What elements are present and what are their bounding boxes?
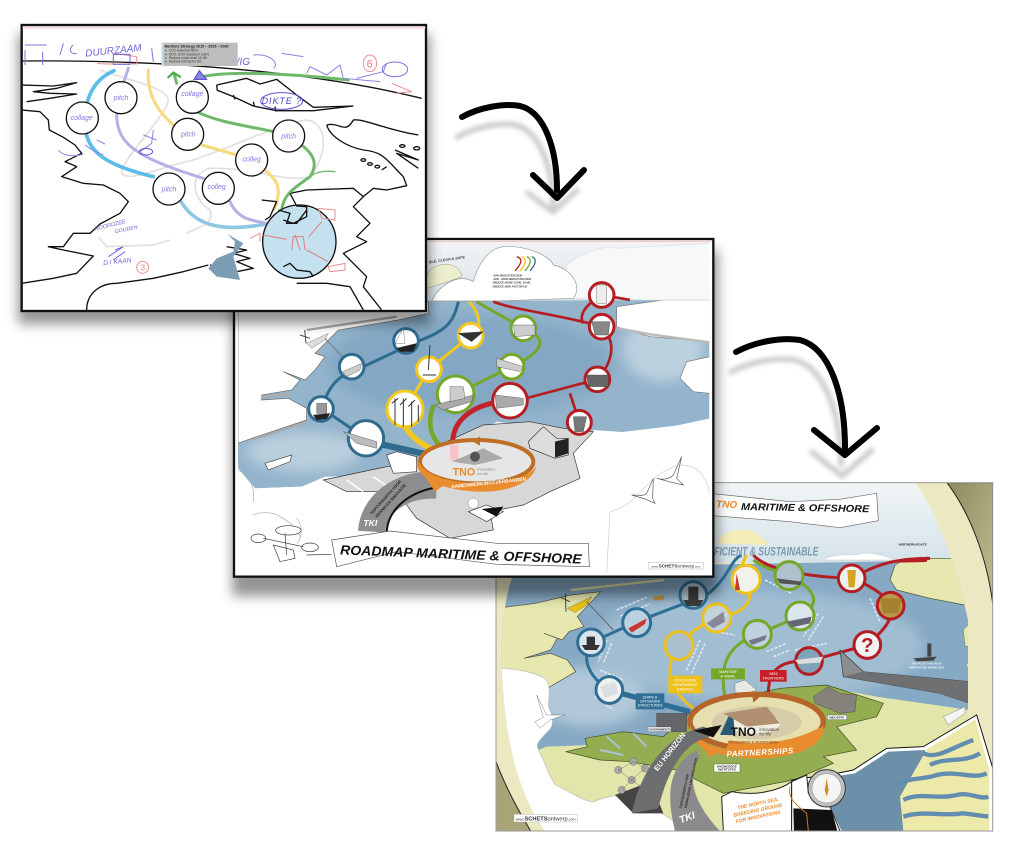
circle: TNO hub [263,205,336,278]
captions: white notes beside circles [595,580,880,710]
circle labels: pitch [113,95,128,102]
label: new frontiers [760,670,787,682]
heading: efficient and sustainable: EFFICIENT & SUSTAINABLE [703,544,819,558]
label: ships and offshore structures [636,693,664,709]
label: ships and offshore structures: STRUCTURES [637,703,663,707]
orange ring: samenwerkingsverbanden: for life [477,471,489,476]
callout: maritime strategy: Maritime Strategy 2015 – 2025 – 2030 [164,44,229,48]
icon: wind turbine and cable [561,593,613,630]
banner: TNO maritime and offshore: MARITIME & OFFSHORE [741,502,870,515]
banner: roadmap maritime and offshore [332,531,589,567]
panel: first whiteboard sketch: 3 [141,264,146,273]
icon: question mark in circle: ? [861,634,874,657]
label: offshore renewable energy: ENERGY [677,687,694,692]
circle labels: collage [71,115,93,122]
signs: THE PLUG AND PLAY [911,661,942,665]
gray arc: TKI: TOPCONSORTIA FOR [679,773,690,809]
text: TKI: TKI [678,810,697,826]
signs [647,543,944,772]
compass [808,770,845,807]
orange ring: samenwerkingsverbanden [417,437,537,492]
text: strategy goals: -20% REDUCTION 2030 [493,273,523,277]
arc: TKI: TOPCONSORTIA VOOR [369,479,402,516]
label: maritime and naval [711,668,745,679]
label: maritime and naval: & NAVAL [720,674,736,678]
text: strategy goals [493,273,532,288]
book: THE NORTH SEA, [737,797,779,811]
banner: TNO maritime and offshore: TNO [716,499,738,511]
label: offshore renewable energy: OFFSHORE [674,677,697,682]
handwritten notes: GOUDEN [114,225,138,235]
handwritten notes: NOORDZEE [94,219,127,233]
porthole ring [496,483,993,831]
gray doodle curves [98,70,323,247]
circle labels: pitch [161,187,176,194]
land: grey Netherlands [323,422,593,538]
signs: INNOVATION WARD BOX [909,665,944,669]
building: industry [813,687,857,713]
arc: TKI: TKI [363,518,378,528]
route: red [493,295,630,422]
route: green [456,302,540,394]
signs: NORTHERN ROUTE [899,543,927,547]
clouds [502,668,675,830]
panel: first whiteboard sketch [22,25,426,311]
logo: schetsontwerp: www.SCHETSontwerp.com [516,816,576,822]
text: TNO logo: TNO [453,467,475,479]
icon: seagulls [632,457,683,503]
text: strategy goals: -40% , 100% REDUCTION 2030 [493,277,532,281]
route: green [174,73,348,210]
book [722,775,840,831]
land: eastern coast [890,558,970,606]
handwritten notes: /IG [236,57,250,68]
route: blue [322,302,458,438]
icon: four colour routes [515,257,535,271]
building: government [657,713,687,732]
building: industry [528,427,568,458]
arrow: sketch to roadmap [457,105,584,212]
icon: seagull [535,695,565,728]
icon: books and graduation cap [468,498,503,522]
signs: KNOWLEDGE [717,764,737,768]
icons: vessels in circles [313,285,610,448]
orange ring: partnerships: PIONEERING & MONITORING [728,740,779,744]
building: office near the ring [734,680,757,693]
orange ring: partnerships: for life [759,732,772,737]
circle labels: colleg [208,184,226,191]
gray arrow: EU Horizon: EU HORIZON [652,731,687,773]
shadow: roadmap panel [232,250,718,596]
icon: wind turbine and cable [300,330,348,363]
label: maritime and naval: MARITIME [719,670,737,674]
circle labels: collage [181,91,204,98]
logo: schetsontwerp: www.SCHETSontwerp.com [651,564,701,569]
icon: atomium [615,758,663,813]
gray arc: TKI [670,750,720,831]
building: government [387,452,417,473]
book: FOR INNOVATIONS [735,810,782,825]
land: white lower right [563,418,710,573]
icon: ship at sea [265,455,292,470]
orange ring: samenwerkingsverbanden: innovation [477,467,496,472]
icon: sun [717,530,768,545]
circle labels [71,91,296,194]
label: ships and offshore structures: OFFSHORE [640,699,661,703]
land: green Netherlands [566,685,883,793]
text: partnerships: PARTNERSHIPS [726,746,794,759]
callout: maritime strategy: Reduce noise level 10 dB [169,56,208,60]
icon: drone [251,526,332,562]
icon: sun [427,264,462,288]
logo: schetsontwerp [648,562,704,569]
cloud: horizon [823,553,895,560]
wing [840,650,970,725]
banner: TNO maritime and offshore [703,493,878,528]
land: white eastern coast [617,300,710,342]
route circles [309,283,614,456]
route circles [578,562,904,703]
signs: GOVERNMENTS [648,728,671,732]
route: cyan [85,68,348,227]
panel: first whiteboard sketch: 6 [367,58,373,70]
signs: INSTITUTES [718,768,736,772]
callout: maritime strategy [162,43,238,66]
orange ring: partnerships: innovation [759,727,780,732]
circle labels: colleg [243,157,261,164]
map [792,715,993,831]
handwritten notes: D.I KAAN [103,257,132,267]
land: white northern coast [238,302,428,443]
route: yellow [148,70,278,210]
callout: maritime strategy: NOX, SOX reduction 100% [169,52,209,56]
label: offshore renewable energy [668,676,702,693]
cloud: lower right [607,465,710,573]
map coastlines [22,61,422,310]
land: northern coast [496,592,601,693]
network circles [66,81,305,205]
gray arc: TKI: KNOWLEDGE AND INNOVATION [684,757,698,809]
signs: INDUSTRY [829,716,845,720]
arc: TKI: KENNIS EN INNOVATIE [374,482,407,519]
callout: maritime strategy: Reduce risk factor f10 [169,60,202,64]
orange ring: samenwerkingsverbanden: SAMENWERKINGSVERBANDEN [451,476,527,490]
label: new frontiers: FRONTIERS [763,676,784,680]
route: yellow [405,302,479,409]
arc: TKI [363,479,437,532]
route: purple [117,68,267,223]
route: offshore renewable energy [670,555,750,708]
callout: maritime strategy: CO2 reduction 80% [169,49,198,53]
icons: vessels inside circles [582,557,937,698]
gray arrow: EU Horizon [632,725,722,813]
route: new frontiers [753,555,930,693]
book: BREEDING GROUND [733,802,784,819]
route: maritime and naval [723,560,814,697]
banner: roadmap maritime and offshore: ROADMAP MARITIME & OFFSHORE [340,542,583,567]
map coastlines: continent [210,193,382,310]
arrow: roadmap to final [731,339,877,476]
label: ships and offshore structures: SHIPS & [643,695,658,699]
handwritten notes: DIKTE ? [262,96,301,106]
estuary [208,234,243,280]
cloud: lower left [238,468,397,573]
text: strategy goals: REDUCE NOISE LEVEL 10 dB [493,281,530,285]
text: clean and safe: BLE, CLEAN & SAFE [429,255,466,264]
label: offshore renewable energy: RENEWABLE [673,682,698,687]
panel: black and white roadmap [234,239,713,577]
handwritten notes [25,43,387,267]
red sketches [97,53,412,273]
label: new frontiers: NEW [769,672,778,676]
handwritten notes: DUURZAAM [85,43,143,60]
circle labels: pitch [280,133,296,140]
orange ring: partnerships [690,691,823,759]
text: TNO logo: TNO [731,725,756,739]
text: strategy goals: REDUCE RISK FACTOR f10 [493,284,528,288]
panel: final colour roadmap [496,483,993,831]
shadow: sketch panel [18,34,430,324]
circle labels: pitch [180,132,196,139]
route: ships and offshore structures [587,555,742,690]
cloud: top [563,243,710,300]
land: southern mainland [538,690,968,830]
sea [238,300,709,488]
